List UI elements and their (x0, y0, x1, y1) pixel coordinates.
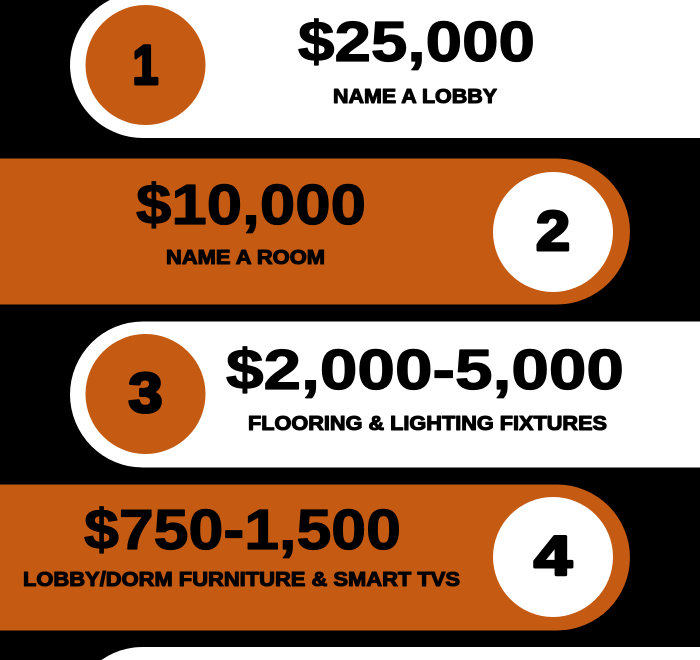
price: $2,000-5,000: $2,000-5,000 (226, 338, 624, 402)
panel: tier 4 (0, 484, 630, 630)
panel: tier 2 (0, 158, 630, 304)
panel: tier 1 (70, 0, 700, 138)
icon: number 2 badge (493, 172, 613, 292)
icon: number 1 badge: 1 (132, 33, 158, 96)
icon: number 2 badge: 2 (536, 199, 570, 262)
label: name a lobby: NAME A LOBBY (333, 86, 498, 108)
price: $10,000: $10,000 (136, 173, 366, 237)
price: $25,000: $25,000 (298, 10, 535, 74)
icon: number 4 badge: 4 (534, 524, 572, 587)
label: name a room: NAME A ROOM (166, 247, 325, 269)
icon: number 1 badge (86, 5, 206, 125)
icon: number 4 badge (493, 497, 613, 617)
label: flooring and lighting fixtures: FLOORING & LIGHTING FIXTURES (248, 413, 607, 435)
panel: tier 3 (70, 322, 700, 468)
panel: tier 5 (cropped) (101, 647, 700, 660)
icon: number 3 badge (86, 334, 206, 454)
icon: number 3 badge: 3 (128, 361, 162, 424)
price: $750-1,500: $750-1,500 (84, 498, 401, 562)
label: lobby/dorm furniture and smart TVs: LOBBY/DORM FURNITURE & SMART TVS (23, 569, 460, 591)
